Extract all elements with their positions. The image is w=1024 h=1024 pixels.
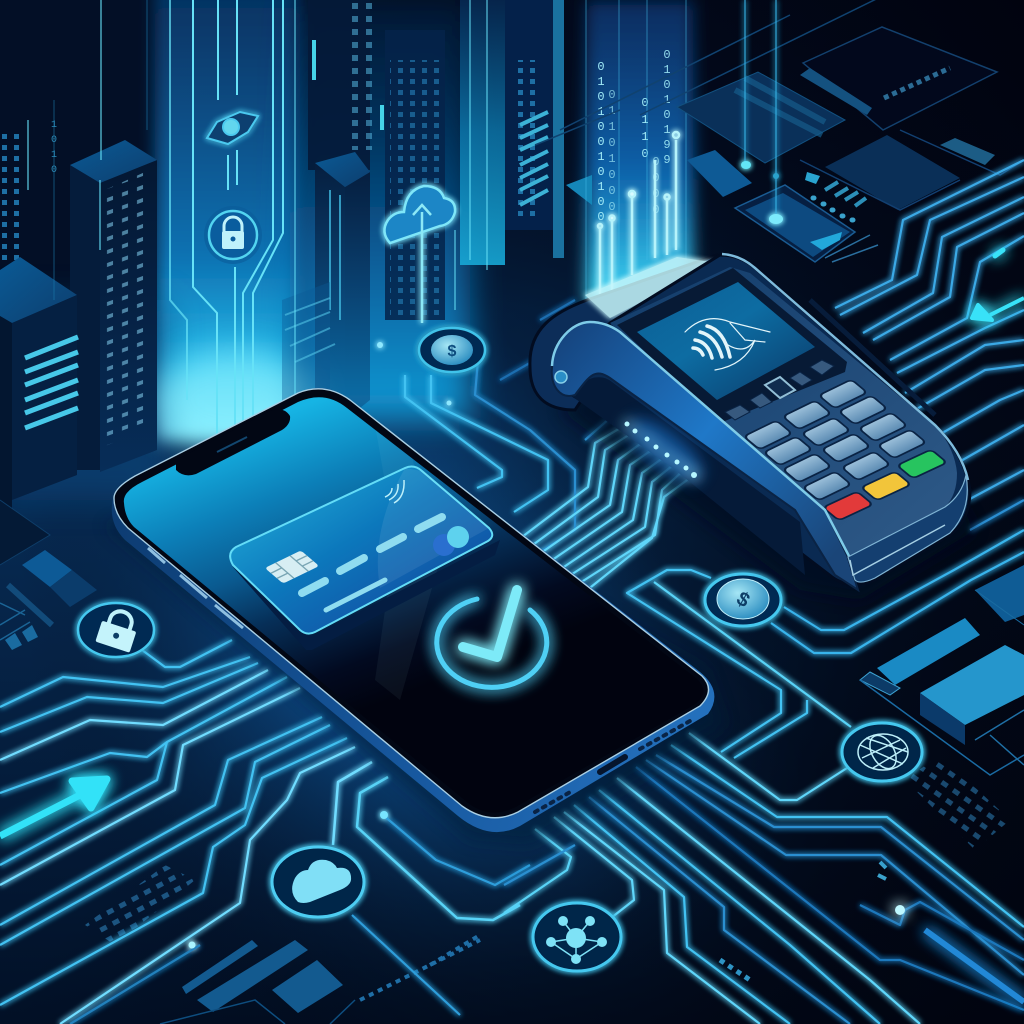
card shadow bbox=[232, 540, 500, 650]
binary streams: 01010010100 bbox=[594, 60, 608, 225]
terminal top face bbox=[610, 267, 957, 557]
panel: data city towers and light beams bbox=[0, 0, 555, 510]
icon: eye sensor bbox=[207, 112, 258, 144]
rising light pins bbox=[598, 132, 679, 295]
cancel key bbox=[823, 491, 873, 521]
panel: right side modules bbox=[720, 565, 1024, 980]
arrow: glowing up-right bbox=[0, 779, 107, 836]
tower: center building bbox=[282, 152, 370, 440]
phone notch bbox=[176, 409, 290, 475]
binary streams: 01101000 bbox=[605, 88, 619, 216]
arrow: glowing down-left bbox=[972, 250, 1024, 320]
binary streams bbox=[594, 48, 674, 225]
light pillars with dots bbox=[741, 0, 783, 224]
circuit lines in the beam bbox=[28, 0, 487, 440]
node: glowing dot and data bar bbox=[895, 905, 1024, 1002]
enter key bbox=[897, 449, 947, 479]
card chip bbox=[265, 550, 319, 584]
binary streams: 0110 bbox=[638, 96, 652, 164]
contactless symbol bbox=[685, 319, 770, 370]
icon: dollar coin right: $ bbox=[733, 588, 753, 612]
side buttons bbox=[148, 548, 243, 628]
soft blue glow at contacts bbox=[618, 408, 712, 492]
traces: lower-right bundle bbox=[504, 733, 1024, 1024]
terminal screen bbox=[637, 282, 815, 400]
panel: left side modules bbox=[0, 500, 97, 650]
panel: isometric circuit board modules bbox=[535, 0, 1024, 262]
terminal body bbox=[572, 255, 970, 584]
check icon bbox=[437, 590, 547, 687]
icon: padlock left bbox=[78, 603, 154, 657]
screen bezel bbox=[617, 268, 847, 423]
traces: right upper bundle bbox=[835, 160, 1024, 500]
front lip bbox=[848, 475, 967, 582]
traces: center and between devices bbox=[377, 300, 1024, 758]
icon: cloud bottom bbox=[272, 847, 364, 917]
keypad bbox=[744, 379, 926, 501]
phone body bbox=[112, 388, 714, 832]
traces: left bundle bbox=[0, 640, 530, 1024]
phone screen bbox=[124, 397, 704, 813]
icon: dollar coin right bbox=[705, 574, 781, 626]
card dashes bbox=[302, 517, 442, 610]
tower: center-left building bbox=[70, 140, 157, 472]
binary streams: 01010199 bbox=[660, 48, 674, 168]
card contactless waves bbox=[385, 480, 404, 503]
binary data column: 1010 bbox=[48, 120, 60, 180]
icon: cloud upload bbox=[384, 186, 455, 323]
glass reflection bbox=[375, 425, 440, 700]
speaker and port bbox=[535, 721, 690, 812]
phone bezel bbox=[114, 389, 709, 818]
terminal shadow bbox=[560, 370, 975, 600]
right highlight edge bbox=[722, 254, 968, 480]
function keys bbox=[725, 360, 834, 420]
front band bbox=[552, 322, 858, 590]
rear printer hump bbox=[530, 255, 728, 410]
clear key bbox=[861, 471, 911, 501]
icon: padlock top bbox=[204, 206, 262, 264]
paper slot glow bbox=[585, 257, 717, 318]
payment terminal bbox=[530, 254, 975, 600]
card logo bbox=[433, 526, 469, 556]
binary streams: 0000 bbox=[649, 155, 663, 219]
smartphone bbox=[105, 388, 725, 845]
icon: network bbox=[533, 903, 621, 971]
phone shadow bbox=[105, 470, 725, 845]
card reflection bbox=[378, 468, 489, 588]
panel: right data beam bbox=[520, 0, 693, 305]
payment card bbox=[230, 467, 500, 650]
icon: dollar coin top bbox=[419, 328, 485, 372]
tower: lower-left building bbox=[0, 257, 78, 510]
icon: dollar coin top: $ bbox=[448, 343, 457, 360]
handle underside bbox=[573, 377, 805, 575]
panel: bottom-left modules bbox=[85, 865, 480, 1024]
icon: globe bbox=[842, 723, 922, 781]
card face bbox=[230, 467, 492, 634]
glowing contact pins bbox=[624, 422, 697, 478]
